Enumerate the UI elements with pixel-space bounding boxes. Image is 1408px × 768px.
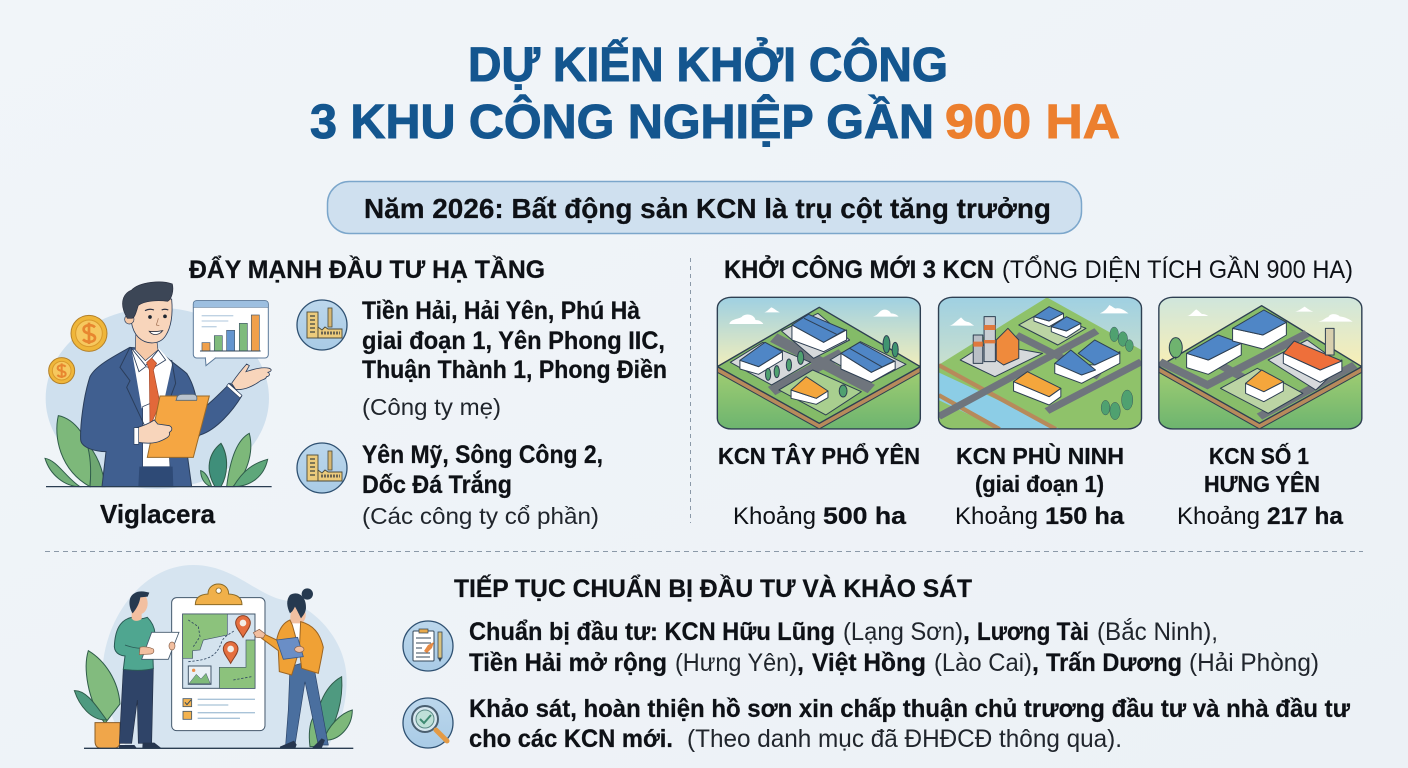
text block: joint stock company projects: Yên Mỹ, Sông Công 2, <box>362 441 603 469</box>
title: DỰ KIẾN KHỞI CÔNG <box>468 37 948 92</box>
text block: investment preparation: Lương Tài <box>977 618 1089 646</box>
label: KCN Tây Phổ Yên: KCN TÂY PHỔ YÊN <box>718 442 920 469</box>
heading: new industrial parks: KHỞI CÔNG MỚI 3 KCN <box>724 254 994 284</box>
heading: new industrial parks <box>724 254 1353 284</box>
label: KCN Số 1 Hưng Yên <box>1177 442 1344 530</box>
text block: investment preparation: Tiền Hải mở rộng <box>469 649 667 677</box>
text block: survey and approval: (Theo danh mục đã ĐHĐCĐ thông qua). <box>687 725 1122 753</box>
text block: investment preparation: , <box>1032 649 1039 677</box>
illustration: team reviewing site map <box>74 565 353 748</box>
panel: infrastructure investment <box>45 255 667 529</box>
text block: joint stock company projects <box>362 441 603 529</box>
subtitle pill: Năm 2026: Bất động sản KCN là trụ cột tăng trưởng <box>364 193 1051 224</box>
right plant <box>209 443 227 487</box>
text block: joint stock company projects: Dốc Đá Trắng <box>362 469 512 499</box>
text block: survey and approval <box>469 695 1351 753</box>
heading: infrastructure: ĐẨY MẠNH ĐẦU TƯ HẠ TẦNG <box>189 255 545 284</box>
label: KCN Số 1 Hưng Yên: KCN SỐ 1 <box>1209 442 1309 469</box>
icon: checklist and pen <box>403 621 453 671</box>
text block: parent company projects: giai đoạn 1, Yên Phong IIC, <box>362 327 665 355</box>
left plant <box>57 416 92 487</box>
illustration: KCN Số 1 Hưng Yên <box>1159 297 1362 430</box>
text block: investment preparation: , <box>797 649 804 677</box>
label: KCN Phù Ninh: (giai đoạn 1) <box>975 471 1104 497</box>
icon: factory 1 <box>297 300 347 350</box>
label: KCN Phù Ninh: KCN PHÙ NINH <box>956 442 1124 469</box>
map pins <box>236 616 250 637</box>
text block: investment preparation: (Lạng Sơn) <box>843 618 963 646</box>
panel: continued preparation and survey <box>74 565 1351 753</box>
icon: magnifier with check <box>403 698 453 748</box>
speech bubble chart <box>193 301 268 358</box>
text block: investment preparation: (Hưng Yên) <box>675 649 797 677</box>
jacket <box>81 347 242 487</box>
text block: parent company projects: (Công ty mẹ) <box>362 394 501 420</box>
title <box>310 37 1120 149</box>
label: KCN Tây Phổ Yên: 500 ha <box>823 503 907 530</box>
title: 3 KHU CÔNG NGHIỆP GẦN <box>310 94 934 149</box>
heading: preparation and survey: TIẾP TỤC CHUẨN BỊ ĐẦU TƯ VÀ KHẢO SÁT <box>454 573 972 603</box>
icon: factory 2 <box>297 443 347 493</box>
title: 900 HA <box>945 96 1120 149</box>
text block: investment preparation: , <box>963 618 970 646</box>
text block: parent company projects: Thuận Thành 1, Phong Điền <box>362 356 667 384</box>
neck and face <box>135 328 158 361</box>
text block: survey and approval: Khảo sát, hoàn thiện hồ sơn xin chấp thuận chủ trương đầu tư và nhà đầu tư <box>469 695 1351 723</box>
text block: parent company projects: Tiền Hải, Hải Yên, Phú Hà <box>362 297 640 325</box>
man <box>119 668 153 743</box>
illustration: KCN Phù Ninh <box>939 297 1142 429</box>
text block: investment preparation: (Lào Cai) <box>934 649 1032 677</box>
right plant <box>316 677 342 738</box>
label: Viglacera: Viglacera <box>100 499 216 529</box>
clipboard board <box>172 598 265 731</box>
left plant <box>86 651 120 723</box>
text block: investment preparation: (Bắc Ninh), <box>1097 617 1218 646</box>
subtitle pill <box>328 182 1082 234</box>
label: KCN Tây Phổ Yên <box>718 442 920 530</box>
text block: joint stock company projects: (Các công ty cổ phần) <box>362 503 599 529</box>
label: KCN Số 1 Hưng Yên: Khoảng <box>1177 503 1260 530</box>
label: KCN Tây Phổ Yên: Khoảng <box>733 503 816 530</box>
label: KCN Phù Ninh: 150 ha <box>1045 503 1125 530</box>
label: KCN Phù Ninh: Khoảng <box>955 503 1038 530</box>
illustration: KCN Tây Phổ Yên <box>717 297 920 430</box>
text block: investment preparation: Chuẩn bị đầu tư: KCN Hữu Lũng <box>469 618 835 646</box>
clipboard <box>147 396 209 457</box>
text block: investment preparation: Trấn Dương <box>1046 649 1182 677</box>
text block: investment preparation: Việt Hồng <box>812 649 926 677</box>
text block: parent company projects <box>362 297 667 420</box>
heading: new industrial parks: (TỔNG DIỆN TÍCH GẦN 900 HA) <box>1002 254 1353 284</box>
text block: investment preparation <box>469 617 1319 677</box>
woman <box>286 660 328 745</box>
checklist <box>183 699 192 707</box>
site map <box>183 614 255 688</box>
panel: three new industrial parks <box>717 254 1362 530</box>
text block: investment preparation: (Hải Phòng) <box>1189 649 1319 677</box>
label: KCN Phù Ninh <box>955 442 1125 530</box>
label: KCN Số 1 Hưng Yên: HƯNG YÊN <box>1204 470 1320 497</box>
hand <box>134 420 172 443</box>
text block: survey and approval: cho các KCN mới. <box>469 725 673 753</box>
illustration: businessman with clipboard <box>45 282 272 489</box>
label: KCN Số 1 Hưng Yên: 217 ha <box>1267 503 1344 530</box>
